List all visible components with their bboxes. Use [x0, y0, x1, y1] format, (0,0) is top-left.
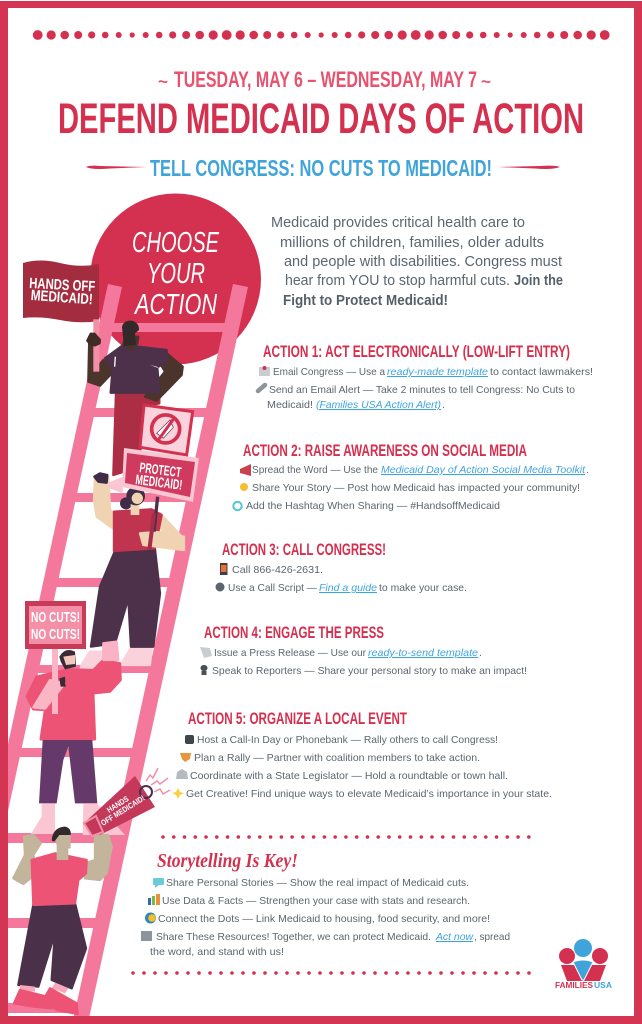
action 2: Medicaid Day of Action Social Media Toolkit: [381, 464, 586, 476]
icon: light bulb: [240, 483, 248, 491]
sign: protect medicaid: [122, 448, 199, 502]
intro paragraph: Fight to Protect Medicaid!: [283, 293, 448, 309]
action 3: Call 866-426-2631.: [232, 564, 323, 576]
icon: envelope: [259, 366, 270, 376]
man body: [86, 319, 183, 475]
icon: speaking head: [216, 582, 224, 592]
icon: press paper: [200, 647, 212, 658]
storytelling panel: Share Personal Stories — Show the real impact of Medicaid cuts.: [166, 877, 469, 889]
action 3: ACTION 3: CALL CONGRESS!: [222, 540, 386, 559]
icon: megaphone: OFF MEDICAID!: [99, 794, 146, 828]
storytelling panel: , spread: [474, 931, 510, 943]
icon: no-cuts round sign: [140, 405, 193, 455]
dotted divider top: [163, 835, 529, 839]
intro paragraph: and people with disabilities. Congress must: [284, 254, 562, 270]
action 3: to make your case.: [379, 582, 467, 594]
storytelling panel: the word, and stand with us!: [150, 946, 284, 958]
action 1: to contact lawmakers!: [490, 366, 593, 378]
icon: telephone: [185, 735, 194, 744]
action 4: ACTION 4: ENGAGE THE PRESS: [204, 623, 384, 642]
action 1: [258, 342, 593, 411]
icon: mobile phone: [220, 563, 228, 575]
intro paragraph: [271, 215, 563, 309]
date line: ~: [158, 72, 168, 91]
sign: no cuts: NO CUTS!: [31, 609, 80, 626]
action 3: [216, 540, 467, 594]
action 2: Share Your Story — Post how Medicaid has impacted your community!: [252, 482, 580, 494]
icon: microphone: [200, 665, 208, 675]
action 1: ready-made template: [387, 366, 488, 378]
storytelling panel: Connect the Dots — Link Medicaid to housing, food security, and more!: [158, 913, 490, 925]
action 5: Coordinate with a State Legislator — Hold a roundtable or town hall.: [190, 770, 508, 782]
action 1: (Families USA Action Alert): [316, 399, 441, 411]
action 1: Email Congress — Use a: [273, 366, 385, 378]
figure: man with flag: [23, 260, 193, 475]
intro paragraph: Medicaid provides critical health care to: [271, 215, 525, 231]
action 5: ACTION 5: ORGANIZE A LOCAL EVENT: [188, 709, 407, 728]
action 4: [200, 623, 527, 677]
icon: bar chart: [148, 894, 160, 905]
icon: cycle arrows: [233, 502, 242, 510]
action 2: Spread the Word — Use the: [252, 464, 378, 476]
sign: no cuts: [25, 601, 86, 649]
icon: megaphone emoji: [240, 464, 251, 476]
action 1: .: [442, 399, 445, 411]
icon: megaphone: HANDS: [105, 794, 131, 815]
icon: government building: [176, 769, 188, 779]
storytelling panel: Share These Resources! Together, we can protect Medicaid.: [156, 931, 431, 943]
logo: Families USA: USA: [594, 981, 612, 990]
action 2: [233, 441, 589, 512]
decorative dotted header row: [33, 30, 610, 40]
intro paragraph: Join the: [514, 273, 563, 289]
sign: protect medicaid: PROTECT: [139, 459, 183, 480]
icon: link: [258, 385, 265, 391]
action 1: Send an Email Alert — Take 2 minutes to tell Congress: No Cuts to: [269, 384, 575, 396]
dotted divider bottom: [133, 971, 534, 975]
sign: protect medicaid: MEDICAID!: [135, 471, 183, 493]
action 5: Plan a Rally — Partner with coalition members to take action.: [194, 752, 480, 764]
action 3: Use a Call Script —: [228, 582, 317, 594]
action 3: Find a guide: [319, 582, 377, 594]
intro paragraph: hear from YOU to stop harmful cuts.: [285, 273, 510, 289]
flag: hands off medicaid: [23, 260, 99, 322]
action 1: Medicaid!: [267, 399, 313, 411]
action 2: .: [586, 464, 589, 476]
flag: hands off medicaid: MEDICAID!: [30, 287, 93, 308]
action 2: Add the Hashtag When Sharing — #HandsoffMedicaid: [246, 500, 500, 512]
figure: man with megaphone: [13, 768, 170, 1014]
logo: Families USA: FAMILIES: [555, 981, 594, 990]
action 4: .: [479, 647, 482, 659]
date line: ~: [481, 72, 491, 91]
storytelling panel: Act now: [435, 931, 474, 943]
figure: woman with sign: [82, 448, 199, 667]
storytelling panel: [141, 850, 510, 958]
intro paragraph: millions of children, families, older adults: [280, 235, 544, 251]
storytelling panel: Use Data & Facts — Strengthen your case with stats and research.: [162, 895, 470, 907]
icon: handshake: [180, 753, 191, 762]
subtitle with flourishes: TELL CONGRESS: NO CUTS TO MEDICAID!: [150, 155, 492, 181]
sign: no cuts: NO CUTS!: [31, 626, 80, 643]
action 5: [172, 709, 552, 800]
icon: globe: [145, 912, 156, 924]
icon: books: [141, 931, 152, 941]
date line: TUESDAY, MAY 6 – WEDNESDAY, MAY 7: [174, 67, 477, 92]
red circle: choose your action: CHOOSE: [132, 227, 219, 259]
action 4: Speak to Reporters — Share your personal story to make an impact!: [212, 665, 527, 677]
red circle: choose your action: YOUR: [147, 258, 205, 290]
purple trousers and shoes: [31, 740, 125, 835]
figure: man with no cuts sign: [25, 601, 125, 835]
ladder: [8, 284, 248, 1016]
red circle: choose your action: [90, 194, 261, 364]
action 5: Get Creative! Find unique ways to elevate Medicaid’s importance in your state.: [186, 788, 552, 800]
heading: storytelling is key: Storytelling Is Key!: [157, 850, 298, 872]
action 4: Issue a Press Release — Use our: [214, 647, 366, 659]
red circle: choose your action: ACTION: [134, 289, 217, 321]
icon: speech bubble: [153, 878, 164, 888]
action 4: ready-to-send template: [368, 647, 478, 659]
icon: sparkles: [172, 788, 184, 799]
flag: hands off medicaid: HANDS OFF: [29, 275, 96, 295]
logo: Families USA: [555, 939, 612, 990]
action 5: Host a Call-In Day or Phonebank — Rally others to call Congress!: [197, 734, 498, 746]
icon: megaphone: [83, 768, 170, 836]
